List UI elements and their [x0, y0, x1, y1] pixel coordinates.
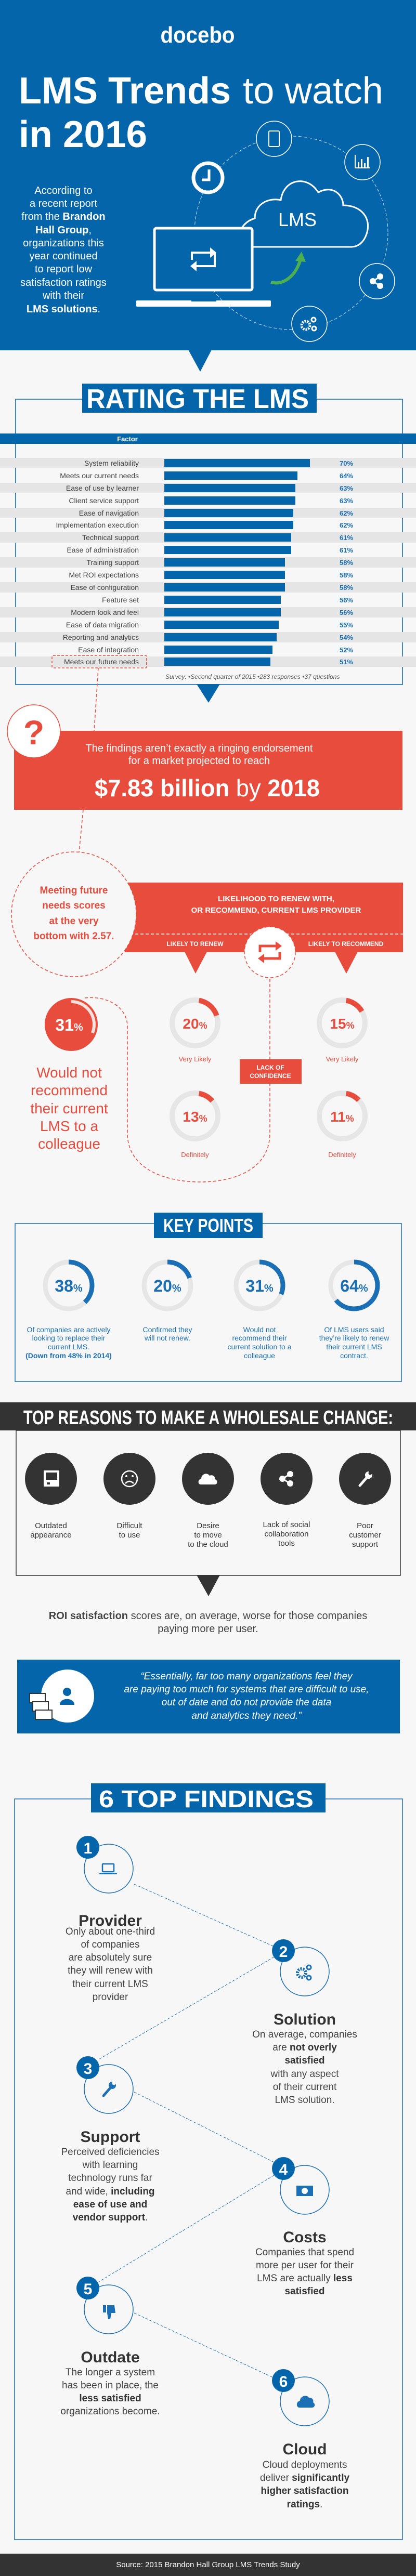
likelihood band — [125, 883, 403, 974]
rating bar chart: Reporting and analytics — [63, 633, 139, 641]
rating bar chart: 54% — [340, 634, 353, 641]
findings panel — [15, 1783, 402, 2540]
finding 5: outdate: less satisfied — [79, 2393, 141, 2404]
icon: share: Lack of social — [263, 1520, 310, 1529]
arrow: rating down — [197, 684, 220, 703]
finding 2: solution: On average, companies — [252, 2029, 357, 2040]
intro text: LMS solutions. — [27, 304, 100, 315]
rating bar chart: Ease of navigation — [79, 509, 139, 517]
rating bar chart: Implementation execution — [56, 521, 139, 529]
key points panel: KEY POINTS — [163, 1215, 253, 1236]
key points panel: 38% — [55, 1277, 83, 1295]
finding 6: cloud: 6 — [279, 2373, 288, 2390]
finding 1: provider: Provider — [79, 1912, 142, 1929]
rating bar chart: Modern look and feel — [71, 608, 139, 616]
rating bar chart: 61% — [340, 534, 353, 542]
finding 4: costs: satisfied — [284, 2286, 325, 2297]
rating bar chart: 51% — [340, 658, 353, 666]
finding 2: solution — [252, 1939, 357, 2106]
rating bar chart — [0, 433, 416, 680]
finding 2: solution: Solution — [274, 2011, 336, 2028]
finding 1: provider: of companies — [81, 1939, 140, 1950]
donut charts: renew/recommend — [168, 996, 369, 1159]
rating bar chart: System reliability — [84, 459, 139, 467]
stat: 31% would not recommend: 31% — [55, 1016, 83, 1034]
rating bar chart: Ease of administration — [67, 546, 139, 554]
rating bar chart: Feature set — [102, 596, 139, 604]
finding 1: provider: provider — [93, 1992, 128, 2003]
key points panel: Would not — [243, 1325, 276, 1334]
finding 6: cloud: higher satisfaction — [261, 2486, 348, 2496]
key points panel: current solution to a — [228, 1343, 292, 1351]
finding 1: provider: are absolutely sure — [69, 1952, 152, 1963]
illustration: LMS cloud and devices — [136, 121, 395, 341]
donut charts: renew/recommend: Definitely — [328, 1151, 356, 1159]
rating bar chart: 62% — [340, 521, 353, 529]
icon: wrench: support — [352, 1540, 379, 1549]
rating bar chart: Training support — [86, 558, 139, 567]
ROI text — [49, 1610, 367, 1635]
donut charts: renew/recommend: 20% — [183, 1016, 207, 1032]
finding 4: costs: Companies that spend — [255, 2247, 354, 2258]
key points panel: their current LMS — [326, 1343, 382, 1351]
key points panel: they’re likely to renew — [319, 1334, 389, 1342]
icon: outdated: appearance — [30, 1531, 72, 1540]
intro text: satisfaction ratings — [20, 277, 107, 288]
finding 3: support: and wide, including — [66, 2186, 155, 2197]
icon: swap circle — [244, 927, 295, 978]
key points panel: recommend their — [232, 1334, 287, 1342]
rating bar chart: Survey: •Second quarter of 2015 •283 responses •37 questions — [165, 673, 340, 680]
donut charts: renew/recommend: 15% — [330, 1016, 355, 1032]
finding 1: provider: 1 — [84, 1840, 92, 1857]
finding 3: support: ease of use and — [73, 2199, 147, 2210]
stat: 31% would not recommend: Would not — [36, 1064, 102, 1081]
callout: meeting future needs — [11, 852, 136, 977]
market banner — [7, 705, 402, 810]
label: lack of confidence: LACK OF — [256, 1064, 284, 1071]
finding 6: cloud: Cloud — [283, 2441, 327, 2458]
finding 5: outdate: Outdate — [81, 2349, 140, 2366]
rating bar chart: Ease of data migration — [66, 621, 139, 629]
quote panel: are paying too much for systems that are difficult to use, — [124, 1684, 369, 1695]
icon: money — [30, 1693, 52, 1719]
rating bar chart: 56% — [340, 609, 353, 616]
icon: wrench: Poor — [357, 1521, 373, 1530]
finding 3: support: vendor support. — [73, 2212, 148, 2223]
rating bar chart: 52% — [340, 646, 353, 654]
icon: question mark — [7, 705, 60, 758]
rating title — [16, 384, 402, 685]
footer: Source: 2015 Brandon Hall Group LMS Trends Study — [116, 2560, 300, 2569]
label: lack of confidence — [240, 1059, 302, 1084]
key points panel: Confirmed they — [143, 1325, 192, 1334]
finding 6: cloud: deliver significantly — [260, 2473, 349, 2483]
donut charts: renew/recommend: Very Likely — [326, 1055, 359, 1063]
callout: meeting future needs: needs scores — [42, 900, 106, 911]
finding 5: outdate: has been in place, the — [62, 2380, 159, 2391]
icon: outdated — [25, 1453, 77, 1540]
donut charts: renew/recommend: Very Likely — [179, 1055, 212, 1063]
rating bar chart: Factor — [117, 435, 138, 443]
key points panel: (Down from 48% in 2014) — [25, 1351, 112, 1360]
rating bar chart: Met ROI expectations — [69, 571, 139, 579]
intro text: to report low — [35, 264, 93, 275]
finding 4: costs: LMS are actually less — [257, 2273, 353, 2284]
icon: cloud: to the cloud — [188, 1540, 228, 1549]
finding 3: support: 3 — [84, 2060, 92, 2078]
header panel — [0, 0, 416, 372]
icon: difficult — [103, 1453, 155, 1540]
icon: wrench — [339, 1453, 391, 1549]
rating bar chart: Ease of configuration — [70, 583, 139, 592]
finding 4: costs: Costs — [283, 2229, 327, 2246]
finding 2: solution: with any aspect — [270, 2069, 339, 2080]
finding 2: solution: satisfied — [284, 2055, 325, 2066]
intro text: Hall Group, — [35, 225, 92, 236]
finding 6: cloud — [260, 2369, 349, 2510]
finding 4: costs: more per user for their — [256, 2260, 354, 2271]
title: to watch — [243, 70, 383, 112]
rating bar chart: Meets our current needs — [60, 471, 139, 480]
finding 2: solution: are not overly — [272, 2042, 337, 2053]
finding 3: support: technology runs far — [68, 2173, 152, 2184]
title: in 2016 — [19, 114, 147, 155]
key points panel: contract. — [340, 1351, 368, 1360]
key points panel: 20% — [153, 1277, 181, 1295]
top reasons panel — [0, 1402, 416, 1575]
intro text: year continued — [29, 251, 98, 262]
finding 4: costs — [255, 2157, 354, 2297]
quote panel — [17, 1660, 400, 1733]
intro text: with their — [42, 290, 84, 301]
icon: cloud: to move — [194, 1531, 222, 1540]
icon: outdated: Outdated — [35, 1521, 67, 1530]
icon: share — [261, 1453, 313, 1548]
finding 5: outdate: 5 — [84, 2281, 92, 2298]
key points panel: Of companies are actively — [27, 1325, 111, 1334]
callout: meeting future needs: Meeting future — [40, 885, 108, 896]
red dashed connector — [79, 668, 98, 852]
finding 3: support: Support — [81, 2128, 140, 2146]
finding 3: support — [61, 2056, 160, 2223]
market banner: The findings aren’t exactly a ringing endorsement — [86, 743, 313, 754]
key points panel: Of LMS users said — [324, 1325, 384, 1334]
icon: share: tools — [278, 1539, 295, 1548]
market banner: for a market projected to reach — [128, 755, 270, 767]
illustration: LMS cloud and devices: LMS — [278, 209, 317, 230]
rating bar chart: 58% — [340, 559, 353, 567]
likelihood band: OR RECOMMEND, CURRENT LMS PROVIDER — [191, 906, 361, 915]
icon: cloud — [182, 1453, 234, 1549]
finding 6: cloud: Cloud deployments — [263, 2460, 347, 2470]
donut charts: renew/recommend: 11% — [330, 1109, 354, 1125]
finding 5: outdate — [60, 2277, 160, 2417]
intro text — [20, 185, 107, 315]
finding 1: provider — [66, 1836, 155, 2003]
title — [19, 70, 383, 155]
callout: meeting future needs: at the very — [49, 916, 99, 927]
finding 1: provider: Only about one-third — [66, 1926, 155, 1937]
finding 6: cloud: ratings. — [287, 2499, 322, 2510]
rating bar chart: 63% — [340, 497, 353, 505]
rating bar chart: 63% — [340, 484, 353, 492]
ROI text: paying more per user. — [158, 1623, 258, 1635]
donut charts: renew/recommend: 13% — [183, 1109, 207, 1125]
likelihood band: LIKELIHOOD TO RENEW WITH, — [218, 895, 334, 903]
stat: 31% would not recommend: LMS to a — [40, 1118, 98, 1134]
rating bar chart: 58% — [340, 584, 353, 592]
finding 4: costs: 4 — [279, 2161, 288, 2178]
finding 3: support: with learning — [82, 2160, 138, 2171]
logo: docebo — [160, 22, 235, 48]
rating title: RATING THE LMS — [86, 384, 309, 414]
finding 2: solution: 2 — [279, 1943, 288, 1961]
arrow: reasons down — [197, 1575, 220, 1596]
rating bar chart: 55% — [340, 621, 353, 629]
key points panel: colleague — [244, 1351, 275, 1360]
ROI text: ROI satisfaction scores are, on average, worse for those companies — [49, 1610, 367, 1622]
footer — [0, 2554, 416, 2576]
finding 1: provider: they will renew with — [68, 1965, 153, 1976]
finding 3: support: Perceived deficiencies — [61, 2147, 160, 2158]
icon: wrench: customer — [349, 1531, 381, 1540]
likelihood band: LIKELY TO RENEW — [166, 940, 224, 948]
intro text: organizations this — [23, 238, 104, 249]
stat: 31% would not recommend: colleague — [38, 1136, 100, 1152]
title: LMS Trends — [19, 70, 231, 112]
rating bar chart: Ease of integration — [78, 646, 139, 654]
key points panel: looking to replace their — [32, 1334, 106, 1342]
stat: 31% would not recommend: recommend — [31, 1082, 108, 1098]
rating bar chart: 58% — [340, 571, 353, 579]
rating bar chart: Technical support — [82, 533, 139, 542]
likelihood band: LIKELY TO RECOMMEND — [308, 940, 384, 948]
rating bar chart: 64% — [340, 472, 353, 480]
red dashed U connector — [85, 977, 270, 1182]
stat: 31% would not recommend: their current — [30, 1100, 108, 1116]
finding 2: solution: of their current — [273, 2082, 337, 2093]
intro text: from the Brandon — [21, 211, 106, 222]
donut charts: renew/recommend: Definitely — [181, 1151, 209, 1159]
intro text: a recent report — [30, 198, 97, 209]
rating bar chart: 70% — [340, 459, 353, 467]
finding 5: outdate: The longer a system — [66, 2367, 155, 2378]
rating bar chart: Meets our future needs — [64, 658, 139, 666]
icon: difficult: to use — [119, 1531, 140, 1540]
rating bar chart: 62% — [340, 509, 353, 517]
rating bar chart: Ease of use by learner — [66, 484, 139, 492]
finding 1: provider: their current LMS — [72, 1979, 148, 1990]
rating bar chart: 61% — [340, 546, 353, 554]
market banner: $7.83 billion by 2018 — [95, 774, 320, 801]
key points panel — [15, 1213, 401, 1382]
icon: user — [60, 1688, 74, 1705]
intro text: According to — [34, 185, 93, 196]
icon: difficult: Difficult — [117, 1521, 142, 1530]
finding 5: outdate: organizations become. — [60, 2406, 160, 2417]
icon: share: collaboration — [264, 1530, 309, 1539]
icon: cloud: Desire — [197, 1521, 219, 1530]
label: lack of confidence: CONFIDENCE — [250, 1072, 291, 1080]
finding 2: solution: LMS solution. — [275, 2095, 335, 2106]
rating bar chart: 56% — [340, 596, 353, 604]
key points panel: current LMS. — [48, 1343, 89, 1351]
stat: 31% would not recommend — [30, 998, 108, 1152]
icon: question mark: ? — [23, 713, 44, 752]
key points panel: 64% — [340, 1277, 368, 1295]
rating bar chart: Client service support — [69, 496, 139, 505]
key points panel: will not renew. — [144, 1334, 190, 1342]
quote panel: “Essentially, far too many organizations feel they — [140, 1671, 353, 1682]
key points panel: 31% — [245, 1277, 274, 1295]
quote panel: and analytics they need.” — [191, 1711, 302, 1721]
callout: meeting future needs: bottom with 2.57. — [33, 931, 114, 942]
quote panel: out of date and do not provide the data — [162, 1697, 331, 1708]
findings panel: 6 TOP FINDINGS — [99, 1785, 314, 1812]
